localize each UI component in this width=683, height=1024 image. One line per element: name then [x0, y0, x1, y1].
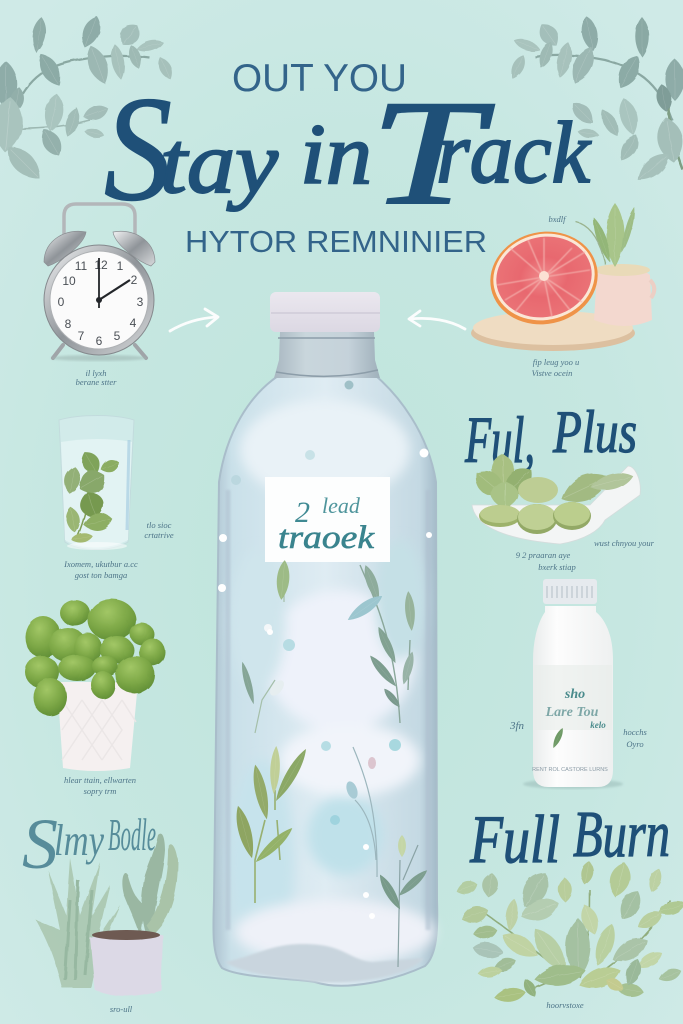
- subheading: HYTOR REMNINIER: [185, 224, 487, 259]
- caption: plant: [64, 775, 136, 796]
- bottle label: traoek: [278, 520, 376, 556]
- top-right eucalyptus garland: [507, 15, 683, 186]
- arrow: clock to bottle: [170, 309, 218, 331]
- bottle cap: [270, 292, 380, 332]
- clock numerals: 5: [114, 329, 121, 343]
- sprig: thin flowers: [344, 747, 377, 877]
- clock numerals: 10: [62, 274, 76, 288]
- sprig: large green: [232, 746, 310, 903]
- clock numerals: 1: [117, 259, 124, 273]
- sprig: top left under label: [239, 560, 291, 733]
- icon: white supplement bottle: RENT ROL CASTORE LURNS: [532, 767, 608, 773]
- caption: bottle right note: hocchs: [623, 727, 647, 737]
- caption: glass side note: tlo sioc: [147, 520, 172, 530]
- text: Bodle: [108, 809, 156, 860]
- caption: grapefruit small note: bxdlf: [548, 214, 567, 224]
- caption: plate: bxerk stiap: [538, 562, 576, 572]
- arrow: grapefruit to bottle: [409, 311, 465, 329]
- lilac pot: [90, 930, 163, 996]
- script title: in: [300, 106, 372, 202]
- clock numerals: [58, 258, 144, 348]
- bottle label script: [545, 687, 606, 730]
- clock numerals: 0: [58, 295, 65, 309]
- caption: grapefruit: Vistve ocein: [532, 368, 572, 378]
- clock numerals: 7: [78, 329, 85, 343]
- script heading: Slmy Bodle: [22, 804, 156, 884]
- icon: glass of water with mint: [59, 416, 134, 550]
- icon: grapefruit on board with pink pot: [471, 203, 654, 351]
- bottle label: 2: [295, 496, 310, 529]
- small plant: [576, 203, 637, 267]
- clock numerals: 11: [75, 259, 88, 273]
- caption: glass: gost ton bamga: [75, 570, 127, 580]
- eyebrow heading: OUT YOU: [232, 57, 407, 100]
- sprig: bottom right: [376, 835, 430, 967]
- caption: plant: hlear ttain, ellwarten: [64, 775, 136, 785]
- caption: plate: 9 2 praaran aye: [516, 550, 570, 560]
- icon: potted green plant: [25, 599, 165, 771]
- script title: S: [104, 66, 172, 232]
- icon: plate of greens and cucumber: [469, 454, 640, 544]
- script heading: Fuly Plus: Plus: [552, 399, 637, 465]
- caption: bottle right note: [623, 727, 647, 749]
- icon: alarm clock: [44, 204, 155, 361]
- cactus: [122, 834, 178, 935]
- sprig: upper right: [345, 563, 417, 723]
- script heading: Slmy Bodle: lmy: [54, 816, 104, 865]
- aloe plant: [36, 858, 120, 988]
- script heading: Fuly Plus: Ful,: [464, 404, 535, 477]
- caption: glass side note: crtatrive: [144, 530, 174, 540]
- clock numerals: 2: [131, 273, 138, 287]
- script heading: Slmy Bodle: S: [22, 804, 58, 884]
- bottle label script: kelo: [590, 720, 606, 730]
- script title: T: [370, 70, 495, 236]
- caption: clock: [76, 368, 117, 387]
- inner water clouds: [230, 400, 435, 964]
- bottle label script: sho: [564, 687, 585, 702]
- bottle label: [265, 477, 390, 562]
- bottle dots: [218, 380, 432, 919]
- caption: plate: [516, 550, 576, 572]
- caption: clock: berane stter: [76, 377, 117, 387]
- clock numerals: 12: [94, 258, 108, 272]
- bottle label script: Lare Tou: [545, 705, 599, 720]
- caption: glass: Ixomem, ukutbur a.cc: [63, 559, 138, 569]
- caption: grapefruit: [532, 357, 579, 378]
- caption: clock: il lyxh: [85, 368, 107, 378]
- top-left eucalyptus garland: [0, 13, 175, 186]
- icon: white supplement bottle: [523, 579, 623, 789]
- caption: glass side note: [144, 520, 174, 540]
- script heading: Full Burn: Full: [469, 801, 560, 877]
- green leaf wreath: [455, 860, 683, 1004]
- bottle body: [213, 376, 437, 986]
- clock numerals: 3: [137, 295, 144, 309]
- script title: tay: [160, 115, 279, 212]
- caption: glass: [63, 559, 138, 580]
- clock numerals: 8: [65, 317, 72, 331]
- caption: plate side note: wust chnyou your: [594, 538, 655, 548]
- caption: bottle right note: Oyro: [626, 739, 644, 749]
- script heading: Full Burn: [469, 798, 670, 877]
- caption: plant: sopry trm: [84, 786, 116, 796]
- script heading: Fuly Plus: [464, 399, 637, 477]
- bottle neck: [274, 332, 380, 378]
- bottle label: lead: [322, 493, 361, 518]
- script title: rack: [436, 105, 592, 202]
- clock numerals: 6: [96, 334, 103, 348]
- script title: [104, 66, 592, 236]
- caption: cactus: sro-ull: [110, 1004, 133, 1014]
- caption: wreath: hoorvstoxe: [546, 1000, 584, 1010]
- clock numerals: 4: [130, 316, 137, 330]
- main water bottle: [213, 292, 437, 986]
- caption: grapefruit: fip leug yoo u: [533, 357, 579, 367]
- caption: bottle left note: 3fn: [509, 720, 525, 732]
